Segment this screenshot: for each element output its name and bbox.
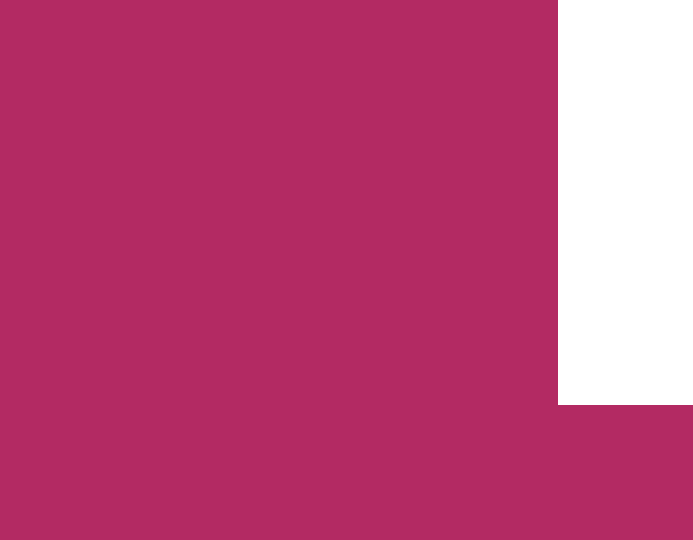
panel: white top-right rectangle bbox=[558, 0, 693, 405]
